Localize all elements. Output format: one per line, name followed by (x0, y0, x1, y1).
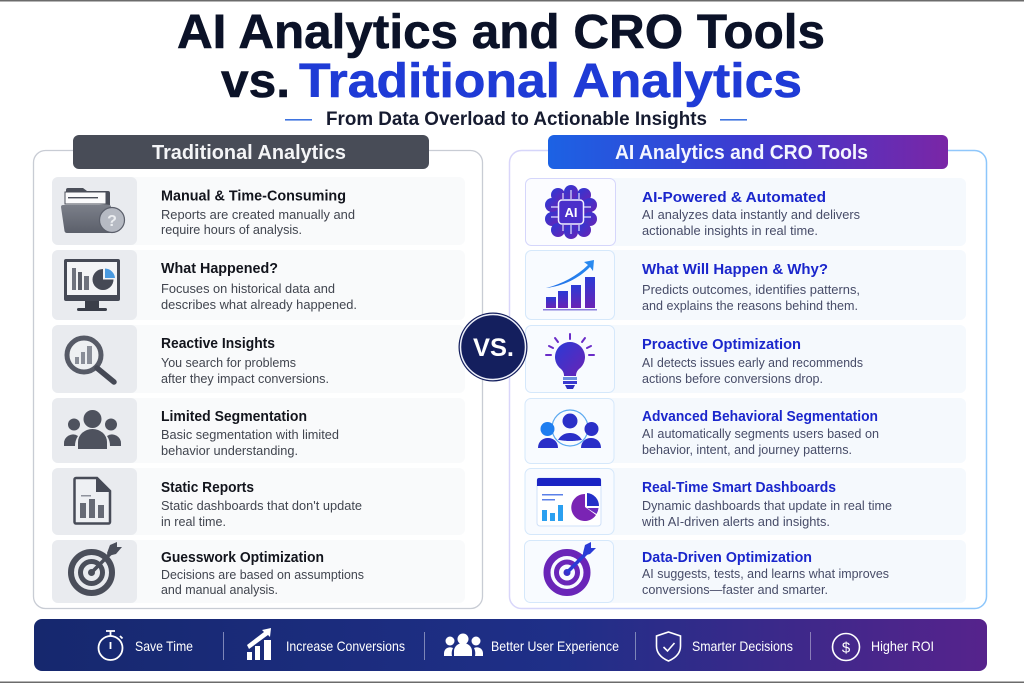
text: advanced behavioral segmentation: behavior, intent, and journey patterns. (642, 443, 852, 457)
row: real-time smart dashboards (525, 468, 966, 535)
text: what happened (161, 261, 357, 312)
text: limited segmentation: Basic segmentation with limited (161, 428, 339, 442)
text: advanced behavioral segmentation: AI automatically segments users based on (642, 427, 879, 441)
icon: folder with question mark (61, 188, 124, 233)
text: reactive insights (161, 336, 329, 386)
text: proactive optimization: Proactive Optimization (642, 337, 801, 353)
row: guesswork optimization (52, 540, 465, 603)
icon: growth chart with arrow (543, 260, 597, 310)
heading: ai analytics and cro tools: AI Analytics and CRO Tools (615, 142, 868, 164)
icon: ai brain: AI (564, 205, 578, 220)
vs badge (458, 312, 528, 382)
row: advanced behavioral segmentation (525, 398, 966, 464)
heading: traditional analytics: Traditional Analytics (152, 142, 346, 164)
text: limited segmentation (161, 409, 339, 458)
title (177, 6, 825, 108)
heading: ai analytics and cro tools (548, 135, 948, 169)
text: what happened: Focuses on historical data and (161, 282, 335, 296)
benefit: smarter decisions (656, 632, 793, 661)
text: static reports (161, 480, 362, 529)
text: what happened: describes what already happened. (161, 298, 357, 312)
text: proactive optimization (642, 337, 863, 386)
text: static reports: in real time. (161, 515, 226, 529)
benefit: higher roi (832, 634, 934, 660)
icon: target with arrow (71, 542, 122, 593)
text: manual and time-consuming: require hours of analysis. (161, 223, 302, 237)
row: proactive optimization (525, 325, 966, 393)
text: guesswork optimization: and manual analysis. (161, 583, 278, 597)
text: what will happen and why: Predicts outcomes, identifies patterns, (642, 283, 860, 297)
title: Traditional Analytics (299, 55, 802, 108)
text: proactive optimization: AI detects issues early and recommends (642, 356, 863, 370)
benefit: increase conversions: Increase Conversions (286, 638, 405, 654)
row: limited segmentation (52, 398, 465, 463)
icon: dashboard window (537, 478, 601, 526)
row: static reports (52, 468, 465, 535)
icon: folder with question mark: ? (107, 213, 117, 230)
vs badge: VS. (473, 334, 514, 362)
benefit: save time: Save Time (135, 638, 193, 654)
text: data-driven optimization (642, 550, 889, 597)
text: limited segmentation: Limited Segmentation (161, 409, 307, 425)
panel: ai analytics and cro tools (510, 135, 986, 608)
row: what happened (52, 250, 465, 320)
row: what will happen and why (525, 250, 966, 320)
text: data-driven optimization: conversions—faster and smarter. (642, 583, 828, 597)
icon: stopwatch (98, 631, 122, 660)
row: manual and time-consuming (52, 177, 465, 245)
text: real-time smart dashboards: Real-Time Smart Dashboards (642, 480, 836, 496)
text: what happened: What Happened? (161, 261, 278, 277)
benefit: save time (98, 631, 193, 660)
icon: group of people (64, 410, 121, 449)
benefit: better user experience: Better User Experience (491, 638, 619, 654)
text: manual and time-consuming: Reports are created manually and (161, 208, 355, 222)
text: ai-powered and automated: AI analyzes data instantly and delivers (642, 208, 860, 222)
benefits bar (34, 619, 987, 671)
text: what will happen and why: What Will Happen & Why? (642, 262, 828, 278)
benefit: smarter decisions: Smarter Decisions (692, 638, 793, 654)
icon: document with bars (74, 478, 110, 524)
text: guesswork optimization: Guesswork Optimization (161, 550, 324, 566)
text: manual and time-consuming (161, 188, 355, 237)
text: data-driven optimization: Data-Driven Optimization (642, 550, 812, 566)
title: vs. (221, 55, 290, 108)
text: limited segmentation: behavior understanding. (161, 444, 298, 458)
text: static reports: Static dashboards that don't update (161, 499, 362, 513)
text: reactive insights: Reactive Insights (161, 336, 275, 352)
text: real-time smart dashboards: with AI-driven alerts and insights. (641, 515, 830, 529)
benefit: better user experience (444, 634, 619, 656)
text: data-driven optimization: AI suggests, tests, and learns what improves (642, 567, 889, 581)
icon: shield check (656, 632, 680, 661)
icon: dollar circle: $ (842, 640, 851, 656)
row: reactive insights (52, 325, 465, 393)
text: reactive insights: after they impact conversions. (161, 372, 329, 386)
text: static reports: Static Reports (161, 480, 254, 496)
text: reactive insights: You search for problems (161, 356, 296, 370)
text: ai-powered and automated: actionable insights in real time. (642, 224, 818, 238)
row: ai-powered and automated (525, 178, 966, 246)
icon: users (444, 634, 483, 656)
text: ai-powered and automated: AI-Powered & Automated (642, 190, 826, 206)
text: real-time smart dashboards (641, 480, 892, 529)
icon: monitor with charts (64, 259, 120, 311)
row: data-driven optimization (524, 540, 966, 603)
benefit: higher roi: Higher ROI (871, 638, 934, 654)
icon: rising bars (247, 628, 271, 660)
title: AI Analytics and CRO Tools (177, 6, 825, 59)
benefit: increase conversions (247, 628, 405, 660)
text: proactive optimization: actions before conversions drop. (642, 372, 823, 386)
text: ai-powered and automated (642, 190, 860, 238)
panel: traditional analytics (34, 135, 482, 608)
text: guesswork optimization (161, 550, 364, 597)
icon: connected users (538, 410, 601, 448)
text: what will happen and why (642, 262, 860, 313)
text: real-time smart dashboards: Dynamic dashboards that update in real time (642, 499, 892, 513)
icon: magnifying glass (67, 338, 114, 382)
text: manual and time-consuming: Manual & Time-Consuming (161, 188, 346, 204)
text: guesswork optimization: Decisions are based on assumptions (161, 568, 364, 582)
heading: traditional analytics (73, 135, 429, 169)
icon: ai brain (545, 185, 597, 239)
subtitle: From Data Overload to Actionable Insights (326, 109, 707, 130)
text: advanced behavioral segmentation: Advanced Behavioral Segmentation (642, 409, 878, 425)
icon: gradient target with arrow (547, 542, 596, 592)
text: advanced behavioral segmentation (642, 409, 879, 457)
icon: light bulb (546, 334, 594, 389)
text: what will happen and why: and explains the reasons behind them. (642, 299, 858, 313)
